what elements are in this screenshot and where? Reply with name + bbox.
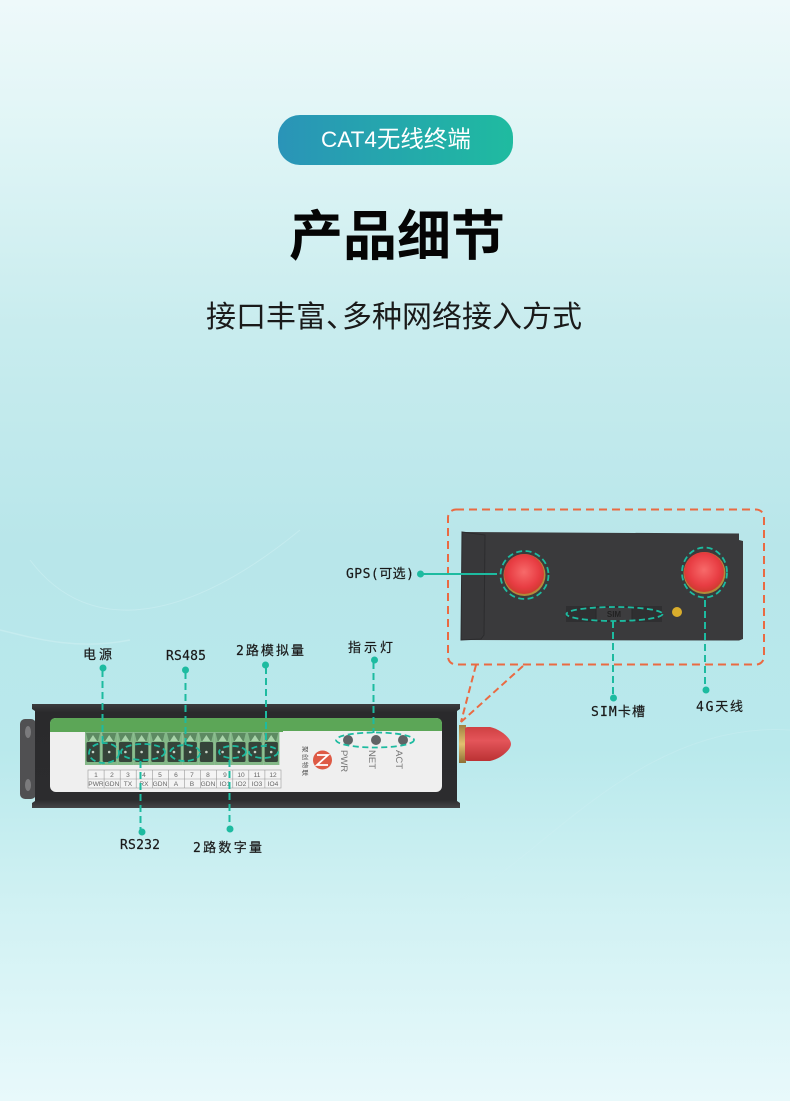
4G highlight ring <box>682 548 727 598</box>
callout: RS485: RS485 <box>166 649 206 664</box>
pin table: 1 <box>94 772 98 779</box>
pin table: 9 <box>223 772 227 779</box>
pin table <box>88 770 281 788</box>
pin table: TX <box>124 781 133 788</box>
SIM card slot: SIM <box>607 610 621 619</box>
panel: router front view <box>20 704 511 808</box>
device top body <box>461 532 743 640</box>
callout: 4G antenna <box>696 600 743 715</box>
callout: GPS <box>346 567 497 582</box>
pin table: GDN <box>105 781 120 788</box>
callout: indicator lights: 指示灯 <box>348 641 393 656</box>
pin table: IO4 <box>268 781 279 788</box>
device left flap <box>461 532 485 640</box>
callout: analog inputs <box>236 643 304 745</box>
callout: GPS: GPS(可选) <box>346 567 414 582</box>
callout: digital inputs: 2路数字量 <box>193 840 262 856</box>
yellow status dot <box>672 607 682 617</box>
callout: SIM slot: SIM卡槽 <box>591 705 645 720</box>
indicator LEDs: PWR <box>338 750 349 772</box>
callout: power: 电源 <box>83 648 112 663</box>
callout: SIM slot <box>591 621 645 720</box>
callout connector lines <box>461 665 523 722</box>
4G antenna connector <box>684 552 726 594</box>
pin table: 11 <box>254 772 261 779</box>
callout: power <box>83 648 112 744</box>
title: 产品细节 <box>289 192 505 271</box>
pin table: 10 <box>237 772 245 779</box>
pin table: 4 <box>142 772 146 779</box>
pin table: 3 <box>126 772 130 779</box>
subtitle: 接口丰富、多种网络接入方式 <box>206 292 582 336</box>
terminal block <box>85 732 279 765</box>
pin table: 12 <box>269 772 277 779</box>
pin table: 7 <box>190 772 194 779</box>
pin table: A <box>174 781 179 788</box>
orange dashed callout frame <box>448 510 764 664</box>
callout: digital inputs <box>193 760 262 856</box>
mounting bracket <box>20 719 36 799</box>
pin table: IO1 <box>220 781 231 788</box>
antenna <box>459 725 511 763</box>
pin table: IO3 <box>252 781 263 788</box>
GPS highlight ring <box>500 551 548 599</box>
pin table: RX <box>139 781 149 788</box>
SIM highlight ring <box>566 607 662 621</box>
indicator LEDs: ACT <box>393 750 404 769</box>
category pill badge <box>278 115 513 165</box>
SIM card slot <box>566 606 662 622</box>
pin table: 2 <box>110 772 114 779</box>
callout: indicator lights <box>348 641 393 733</box>
callout: analog inputs: 2路模拟量 <box>236 643 304 659</box>
pin table: B <box>190 781 195 788</box>
panel: router top view zoom <box>448 510 764 722</box>
GPS antenna connector <box>504 554 546 596</box>
callout: 4G antenna: 4G天线 <box>696 700 743 715</box>
pin table: 5 <box>158 772 162 779</box>
callout: RS232 <box>120 761 160 853</box>
category pill badge: CAT4无线终端 <box>321 126 471 152</box>
indicator LEDs <box>338 735 408 772</box>
router body <box>32 704 460 808</box>
pin table: 6 <box>174 772 178 779</box>
pin table: GDN <box>201 781 216 788</box>
pin table: GDN <box>153 781 168 788</box>
callout: RS232: RS232 <box>120 838 160 853</box>
front label <box>50 718 442 792</box>
brand logo: 聚创物联 <box>301 746 310 776</box>
indicator LEDs: NET <box>366 750 377 769</box>
pin table: IO2 <box>236 781 247 788</box>
brand logo <box>301 746 332 776</box>
pin table: 8 <box>206 772 210 779</box>
terminal highlight rings <box>89 732 414 763</box>
callout: RS485 <box>166 649 206 745</box>
pin table: PWR <box>88 781 104 788</box>
